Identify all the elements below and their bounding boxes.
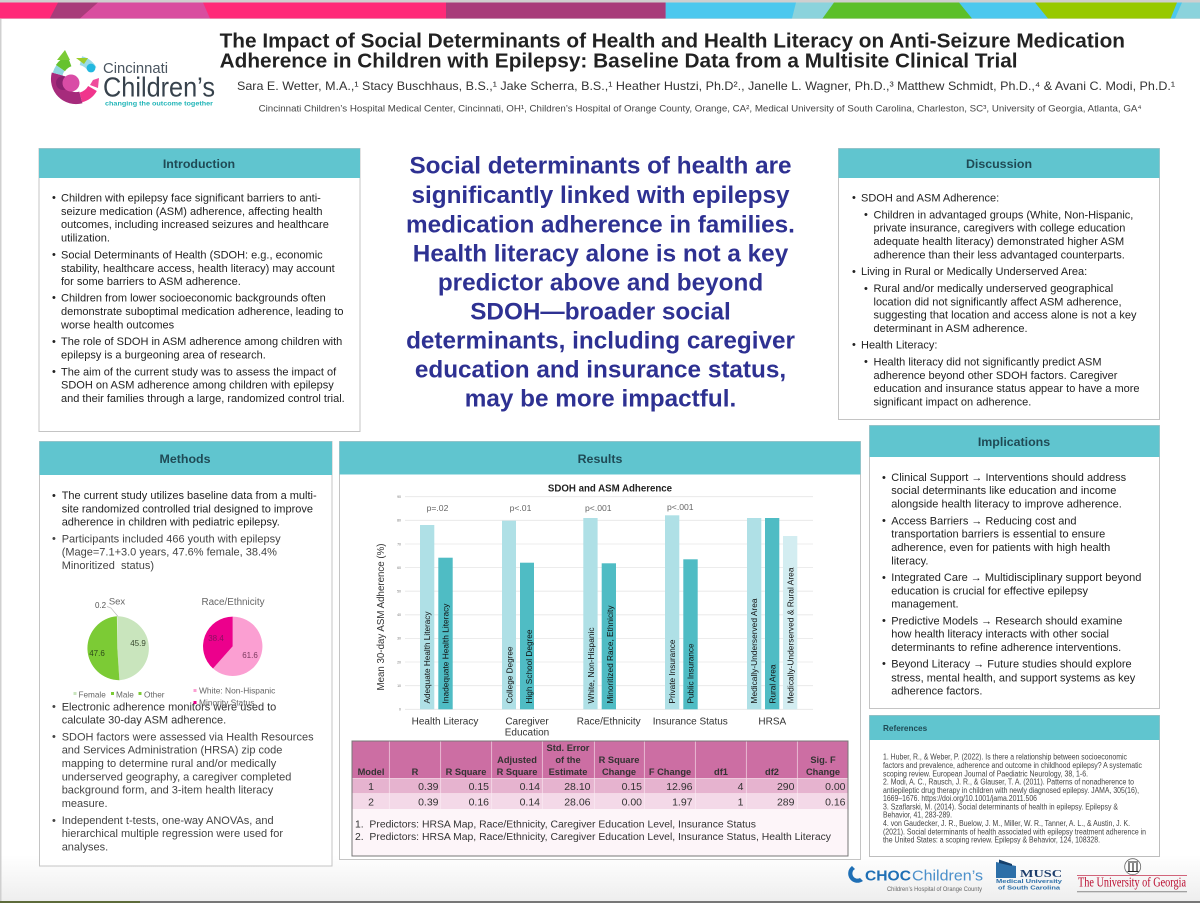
pie chart: race/ethnicity: 61.6 xyxy=(242,651,258,660)
methods text: measures and analyses: underserved geography, a caregiver completed xyxy=(62,772,291,784)
introduction text: Children with epilepsy face significant barriers to anti- xyxy=(61,192,321,204)
panel: results xyxy=(340,442,860,860)
bar chart: SDOH and ASM adherence: Health Literacy xyxy=(412,716,478,728)
discussion text: Children in advantaged groups (White, Non-Hispanic, xyxy=(874,210,1133,222)
regression table: 12.96 xyxy=(666,781,693,793)
key takeaway statement: Health literacy alone is not a key xyxy=(413,240,789,268)
methods text: measures and analyses: Independent t-tests, one-way ANOVAs, and xyxy=(62,815,274,827)
references text: antiepileptic drug therapy in children with newly diagnosed epilepsy. JAMA, 305(16), xyxy=(883,786,1139,795)
regression table: 2. Predictors: HRSA Map, Race/Ethnicity, Caregiver Education Level, Insurance Status, Health Literacy xyxy=(355,832,831,843)
introduction text: outcomes, including increased seizures and healthcare xyxy=(61,219,329,231)
implications text: adherence factors. xyxy=(891,685,982,697)
regression table: 1 xyxy=(738,796,744,808)
bar chart: SDOH and ASM adherence: Minoritized Race, Ethnicity xyxy=(605,605,615,704)
regression table: df1 xyxy=(714,767,728,777)
implications text: transportation barriers is essential to ensure xyxy=(891,529,1105,541)
references text: 1. Huber, R., & Weber, P. (2022). Is there a relationship between socioeconomic xyxy=(883,752,1127,762)
methods text: measures and analyses: hierarchical multiple regression were used for xyxy=(62,828,283,840)
pie chart: sex: Female xyxy=(78,690,106,700)
discussion text: • xyxy=(852,339,856,351)
bar chart: SDOH and ASM adherence: p<.01 xyxy=(510,503,532,513)
discussion text: determinant in ASM adherence. xyxy=(874,323,1028,335)
implications text: • xyxy=(882,615,886,627)
discussion text: SDOH and ASM Adherence: xyxy=(861,192,999,204)
implications text: literacy. xyxy=(891,555,928,567)
introduction header: Introduction xyxy=(163,157,235,171)
references text xyxy=(883,752,1146,844)
implications text: Beyond Literacy → Future studies should explore xyxy=(891,659,1132,671)
regression table: 2 xyxy=(368,796,374,808)
pie chart: race/ethnicity: 38.4 xyxy=(208,634,224,643)
bar chart: SDOH and ASM adherence: Inadequate Health Literacy xyxy=(440,603,450,704)
discussion text: education and insurance status appear to have a more xyxy=(874,383,1140,395)
references text: 3. Szaflarski, M. (2014). Social determinants of health in epilepsy. Epilepsy & xyxy=(883,802,1119,812)
discussion text: Living in Rural or Medically Underserved Area: xyxy=(861,266,1087,278)
discussion header: Discussion xyxy=(966,157,1032,171)
top colour banner xyxy=(0,2,1200,18)
bar chart: SDOH and ASM adherence: 0 xyxy=(399,708,401,712)
bar chart: SDOH and ASM adherence: Race/Ethnicity xyxy=(577,716,641,728)
panel: discussion xyxy=(838,148,1160,420)
pie chart: sex xyxy=(74,596,165,700)
regression table: 1 xyxy=(368,781,374,793)
implications text: management. xyxy=(891,599,959,611)
implications text: • xyxy=(882,472,886,484)
regression table: 0.39 xyxy=(418,796,439,808)
methods text: study and participants xyxy=(52,490,317,572)
logo: MUSC xyxy=(996,860,1062,892)
regression table: 1.97 xyxy=(672,796,693,808)
key takeaway statement: SDOH—broader social xyxy=(470,298,731,326)
bar chart: SDOH and ASM adherence: 40 xyxy=(397,613,401,617)
methods text: measures and analyses: measure. xyxy=(62,798,108,810)
regression table: Model xyxy=(358,767,384,777)
bar chart: SDOH and ASM adherence: 50 xyxy=(397,590,401,594)
logo: CHOC Children's: Children’s Hospital of Orange County xyxy=(887,886,983,893)
introduction text xyxy=(52,192,345,405)
bar chart: SDOH and ASM adherence: Adequate Health Literacy xyxy=(422,611,432,704)
references header xyxy=(870,716,1160,740)
methods text: study and participants: Minoritized status) xyxy=(62,560,154,572)
introduction text: worse health outcomes xyxy=(60,320,175,332)
pie chart: race/ethnicity: White: Non-Hispanic xyxy=(199,686,275,696)
bar chart: SDOH and ASM adherence: White, Non-Hispanic xyxy=(586,627,596,704)
introduction text: utilization. xyxy=(61,232,110,244)
results header xyxy=(340,442,860,474)
regression table: 289 xyxy=(777,796,795,808)
implications header xyxy=(870,426,1160,457)
methods text: study and participants: • xyxy=(52,533,56,545)
key takeaway statement xyxy=(406,152,795,412)
key takeaway statement: medication adherence in families. xyxy=(406,212,795,238)
bar chart: SDOH and ASM adherence: Private Insurance xyxy=(667,639,677,704)
panel: references xyxy=(870,716,1160,856)
methods text: measures and analyses: SDOH factors were assessed via Health Resources xyxy=(62,731,314,743)
bar chart: SDOH and ASM adherence: 90 xyxy=(397,495,401,499)
discussion text: Health Literacy: xyxy=(861,340,937,352)
title: Adherence in Children with Epilepsy: Baseline Data from a Multisite Clinical Trial xyxy=(220,51,1018,73)
bar chart: SDOH and ASM adherence: 60 xyxy=(397,566,401,570)
discussion text: Rural and/or medically underserved geographical xyxy=(874,283,1113,295)
bar chart: SDOH and ASM adherence: 30 xyxy=(397,637,401,641)
bar chart: SDOH and ASM adherence: 10 xyxy=(397,684,401,688)
regression table: Estimate xyxy=(549,767,587,777)
methods text: study and participants: adherence in children with pediatric epilepsy. xyxy=(62,517,280,529)
discussion text: suggesting that location and access alone is not a key xyxy=(874,310,1137,322)
key takeaway statement: may be more impactful. xyxy=(465,386,736,412)
regression table xyxy=(352,741,848,856)
introduction header xyxy=(39,148,360,178)
logo wordmark: Children's: Children’s xyxy=(103,72,215,102)
methods text: study and participants: site randomized controlled trial designed to improve xyxy=(62,503,313,515)
key takeaway statement: determinants, including caregiver xyxy=(406,328,795,354)
references header: References xyxy=(883,724,928,733)
pie chart: sex: Sex xyxy=(109,596,125,608)
introduction text: • xyxy=(52,249,56,261)
introduction text: • xyxy=(52,336,56,348)
implications text: Clinical Support → Interventions should address xyxy=(891,472,1127,484)
logo: CHOC Children's: CHOC xyxy=(865,868,912,884)
bar chart: SDOH and ASM adherence: p<.001 xyxy=(585,503,612,513)
introduction text: SDOH on ASM adherence among children with epilepsy xyxy=(61,380,334,392)
regression table: 4 xyxy=(738,781,744,793)
regression table: 0.15 xyxy=(622,781,642,793)
implications text: alongside health literacy to improve adherence. xyxy=(891,498,1122,510)
implications text: Access Barriers → Reducing cost and xyxy=(891,515,1077,527)
bar chart: SDOH and ASM adherence: 20 xyxy=(397,660,401,664)
introduction text: • xyxy=(52,292,56,304)
references text: 2. Modi, A. C., Rausch, J. R., & Glauser, T. A. (2011). Patterns of nonadherence to xyxy=(883,778,1135,786)
bar chart: SDOH and ASM adherence: Education xyxy=(505,728,549,738)
discussion text: significant impact on adherence. xyxy=(874,396,1031,408)
introduction text: and their families through a large, randomized control trial. xyxy=(61,393,345,405)
methods text: study and participants: The current study utilizes baseline data from a multi- xyxy=(62,490,317,502)
panel: implications xyxy=(870,426,1160,708)
regression table: df2 xyxy=(765,767,779,777)
regression table: of the xyxy=(555,755,581,765)
key takeaway statement: predictor above and beyond xyxy=(438,270,763,296)
introduction text: • xyxy=(52,366,56,378)
introduction text: epilepsy is a burgeoning area of research. xyxy=(61,350,266,362)
regression table: 28.06 xyxy=(564,796,591,808)
logo: Cincinnati Children's xyxy=(56,50,215,107)
implications text xyxy=(882,472,1141,697)
methods text: measures and analyses: background form, and 3-item health literacy xyxy=(62,785,274,797)
bar chart: SDOH and ASM adherence: p<.001 xyxy=(667,502,694,512)
introduction text: for some barriers to ASM adherence. xyxy=(61,276,241,288)
bar chart: SDOH and ASM adherence: 70 xyxy=(397,542,401,546)
methods text: measures and analyses: analyses. xyxy=(62,842,108,854)
methods text: measures and analyses xyxy=(52,701,314,854)
references text: scoping review. European Journal of Paediatric Neurology, 38, 1-6. xyxy=(883,770,1088,778)
regression table: R Square xyxy=(497,767,537,777)
pie chart: sex: 0.2 xyxy=(95,601,107,610)
logo tagline: changing the outcome together xyxy=(105,100,214,107)
implications text: social determinants like education and income xyxy=(891,485,1116,497)
introduction text: • xyxy=(52,192,56,204)
regression table: F Change xyxy=(649,767,691,777)
regression table: 0.00 xyxy=(825,781,846,793)
discussion text: private insurance, caregivers with college education xyxy=(874,223,1125,235)
references text: factors and prevalence, adherence and outcome in childhood epilepsy? A systematic xyxy=(883,761,1142,770)
discussion text xyxy=(852,192,1140,408)
implications text: adherence, even for patients with high health xyxy=(891,542,1110,554)
regression table: 0.14 xyxy=(520,796,540,808)
implications text: • xyxy=(882,515,886,527)
regression table: 290 xyxy=(777,781,795,793)
methods text: study and participants: Participants included 466 youth with epilepsy xyxy=(62,534,281,546)
logo: CHOC Children's xyxy=(848,866,983,893)
implications text: stress, mental health, and support systems as key xyxy=(891,672,1136,684)
pie chart: race/ethnicity: Race/Ethnicity xyxy=(201,597,265,608)
discussion header xyxy=(838,148,1160,178)
implications text: determinants to refine adherence interventions. xyxy=(891,642,1121,654)
logo: CHOC Children's: Children’s xyxy=(912,868,983,884)
bar chart: SDOH and ASM adherence: Insurance Status xyxy=(653,716,728,728)
regression table: Std. Error xyxy=(547,743,590,753)
methods text: measures and analyses: • xyxy=(52,815,56,827)
bar chart: SDOH and ASM adherence: Rural Area xyxy=(768,664,778,704)
introduction text: Social Determinants of Health (SDOH: e.g., economic xyxy=(61,250,323,262)
key takeaway statement: education and insurance status, xyxy=(415,356,786,384)
introduction text: stability, healthcare access, health literacy) may account xyxy=(61,263,335,275)
regression table: Adjusted xyxy=(497,755,537,765)
discussion text: • xyxy=(864,356,868,368)
discussion text: adherence than their less advantaged counterparts. xyxy=(874,250,1125,262)
introduction text: The aim of the current study was to assess the impact of xyxy=(61,366,337,378)
references text: 4. von Gaudecker, J. R., Buelow, J. M., Miller, W. R., Tanner, A. L., & Austin, J. K. xyxy=(883,819,1130,828)
discussion text: • xyxy=(864,283,868,295)
implications text: how health literacy interacts with other social xyxy=(891,629,1109,641)
regression table: Sig. F xyxy=(810,755,836,765)
logo: MUSC: of South Carolina xyxy=(998,886,1061,892)
implications text: • xyxy=(882,572,886,584)
discussion text: • xyxy=(864,209,868,221)
bar chart: SDOH and ASM adherence: 80 xyxy=(397,519,401,523)
results header: Results xyxy=(578,452,622,466)
regression table: 0.16 xyxy=(825,796,846,808)
bar chart: SDOH and ASM adherence: College Degree xyxy=(504,646,514,704)
bar chart: SDOH and ASM adherence: Medically-Underserved Area xyxy=(749,598,759,704)
regression table: 0.39 xyxy=(418,781,439,793)
implications text: Predictive Models → Research should examine xyxy=(891,615,1122,627)
regression table: R Square xyxy=(599,755,639,765)
pie chart: sex: 47.6 xyxy=(89,649,105,658)
methods text: study and participants: (Mage=7.1+3.0 years, 47.6% female, 38.4% xyxy=(62,547,277,559)
bar chart: SDOH and ASM adherence: Mean 30-day ASM Adherence (%) xyxy=(376,544,387,690)
references text: the United States: a scoping review. Epilepsy & Behavior, 124, 108328. xyxy=(883,836,1100,844)
logo: MUSC: Medical University xyxy=(996,879,1062,885)
key takeaway statement: significantly linked with epilepsy xyxy=(411,182,790,209)
title xyxy=(220,31,1125,73)
regression table: 0.15 xyxy=(469,781,489,793)
discussion text: adequate health literacy) demonstrated higher ASM xyxy=(874,236,1124,248)
title: The Impact of Social Determinants of Health and Health Literacy on Anti-Seizure Medication xyxy=(220,31,1125,53)
regression table: 28.10 xyxy=(564,781,591,793)
implications text: education is crucial for effective epilepsy xyxy=(891,585,1088,597)
discussion text: adherence beyond other SDOH factors. Caregiver xyxy=(874,370,1118,382)
bar chart: SDOH and ASM adherence: Medically-Underserved & Rural Area xyxy=(786,567,796,704)
discussion text: location did not significantly affect ASM adherence, xyxy=(874,297,1122,309)
bar chart: SDOH and ASM adherence: High School Degree xyxy=(524,629,534,704)
pie chart: race/ethnicity: Minority Status xyxy=(199,698,254,708)
regression table: Change xyxy=(602,767,636,777)
pie chart: sex: Male xyxy=(116,690,134,700)
implications header: Implications xyxy=(978,435,1050,449)
panel: methods xyxy=(40,442,332,866)
references text: Behavior, 41, 283-289. xyxy=(883,810,952,820)
bar chart: SDOH and ASM adherence: p=.02 xyxy=(427,503,449,513)
pie chart: sex: 45.9 xyxy=(130,639,146,648)
references text: (2021). Social determinants of health associated with epilepsy treatment adherence in xyxy=(883,828,1146,836)
methods header xyxy=(40,442,332,475)
regression table: R Square xyxy=(446,767,486,777)
affiliations: Cincinnati Children’s Hospital Medical Center, Cincinnati, OH¹, Children’s Hospital of Orange County, Orange, CA², Medical University of South Carolina, Charleston, SC³, University of Georgia, Atlanta, GA⁴ xyxy=(259,104,1142,114)
introduction text: The role of SDOH in ASM adherence among children with xyxy=(61,336,342,348)
regression table: Change xyxy=(806,767,840,777)
methods header: Methods xyxy=(160,452,211,466)
methods text: study and participants: • xyxy=(52,490,56,502)
authors: Sara E. Wetter, M.A.,¹ Stacy Buschhaus, B.S.,¹ Jake Scherra, B.S.,¹ Heather Hustzi, Ph.D²., Janelle L. Wagner, Ph.D.,³ Matthew Schmidt, Ph.D.,⁴ & Avani C. Modi, Ph.D.¹ xyxy=(237,79,1175,93)
logo: University of Georgia xyxy=(1077,859,1187,892)
regression table: 1. Predictors: HRSA Map, Race/Ethnicity, Caregiver Education Level, Insurance Status xyxy=(355,820,756,830)
bar chart: SDOH and ASM adherence: Caregiver xyxy=(505,716,549,728)
discussion text: • xyxy=(852,192,856,204)
bar chart: SDOH and ASM adherence xyxy=(376,484,813,738)
key takeaway statement: Social determinants of health are xyxy=(409,152,792,180)
regression table: R xyxy=(412,767,419,777)
discussion text: • xyxy=(852,266,856,278)
logo: MUSC: MUSC xyxy=(1020,868,1062,880)
bar chart: SDOH and ASM adherence: HRSA xyxy=(758,716,787,728)
regression table: 0.00 xyxy=(622,796,642,808)
introduction text: seizure medication (ASM) adherence, affecting health xyxy=(61,206,322,218)
panel: introduction xyxy=(39,148,360,432)
references text: 1669–1676. https://doi.org/10.1001/jama.2011.506 xyxy=(883,794,1037,803)
methods text: measures and analyses: • xyxy=(52,701,56,713)
implications text: Integrated Care → Multidisciplinary support beyond xyxy=(891,572,1141,584)
introduction text: Children from lower socioeconomic backgrounds often xyxy=(61,292,326,304)
methods text: measures and analyses: and Services Administration (HRSA) zip code xyxy=(62,745,282,757)
regression table: 0.16 xyxy=(469,796,489,808)
logo wordmark: Cincinnati: Cincinnati xyxy=(103,61,168,77)
pie chart: race/ethnicity xyxy=(194,597,275,708)
discussion text: Health literacy did not significantly predict ASM xyxy=(874,357,1102,369)
methods text: measures and analyses: mapping to determine rural and/or medically xyxy=(62,758,277,770)
implications text: • xyxy=(882,658,886,670)
methods text: measures and analyses: calculate 30-day ASM adherence. xyxy=(62,715,226,727)
regression table: 0.14 xyxy=(520,781,540,793)
pie chart: sex: Other xyxy=(144,690,165,700)
methods text: measures and analyses: • xyxy=(52,731,56,743)
methods text: measures and analyses: Electronic adherence monitors were used to xyxy=(62,701,276,713)
bar chart: SDOH and ASM adherence: SDOH and ASM Adherence xyxy=(548,484,673,494)
introduction text: demonstrate suboptimal medication adherence, leading to xyxy=(61,306,344,318)
bar chart: SDOH and ASM adherence: Public Insurance xyxy=(686,643,696,704)
